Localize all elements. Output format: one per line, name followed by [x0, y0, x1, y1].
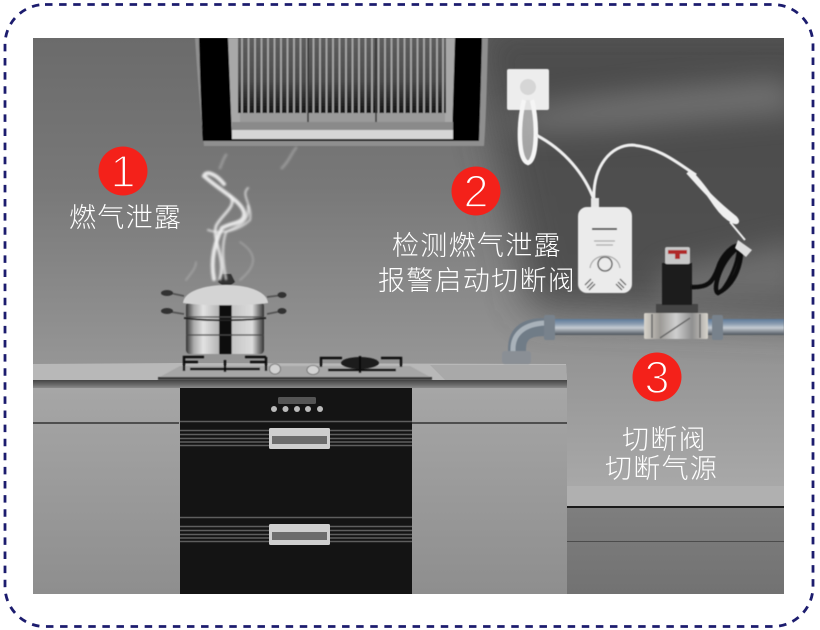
detector logo [592, 228, 617, 230]
control panel [271, 397, 323, 412]
step 1 marker: 1 [110, 146, 136, 197]
steamer pot [161, 274, 286, 354]
step 3 label [606, 426, 716, 480]
shut-off valve [644, 247, 708, 339]
detector dial [590, 256, 620, 271]
step 1 label: 燃气泄露 [69, 203, 182, 233]
wall background [33, 20, 820, 486]
baseboard and floor at right [567, 486, 784, 594]
right burner [321, 356, 401, 373]
smoke from the pot [186, 148, 296, 280]
step 2 label [378, 231, 576, 296]
step 2 label: 报警启动切断阀 [378, 266, 576, 296]
gas stove [158, 356, 432, 380]
step 3 marker [632, 352, 682, 403]
valve cable coil [691, 246, 741, 293]
left burner [184, 357, 266, 372]
wall socket [507, 69, 549, 163]
step 2 label: 检测燃气泄露 [392, 231, 562, 261]
lower drawer handle [269, 524, 330, 545]
step 2 marker: 2 [463, 166, 489, 217]
gas pipe with elbow [502, 315, 784, 364]
gas detector [578, 198, 632, 293]
white cables [536, 135, 752, 257]
knobs [270, 364, 319, 374]
range hood [195, 38, 488, 146]
step 3 label: 切断阀 [622, 425, 707, 455]
base cabinets and countertop [33, 363, 567, 594]
step 3 marker: 3 [644, 352, 670, 403]
disinfection cabinet [180, 388, 412, 594]
step 3 label: 切断气源 [605, 454, 718, 484]
upper drawer handle [269, 428, 330, 449]
step 2 marker [452, 166, 500, 217]
step 1 marker [98, 146, 148, 197]
